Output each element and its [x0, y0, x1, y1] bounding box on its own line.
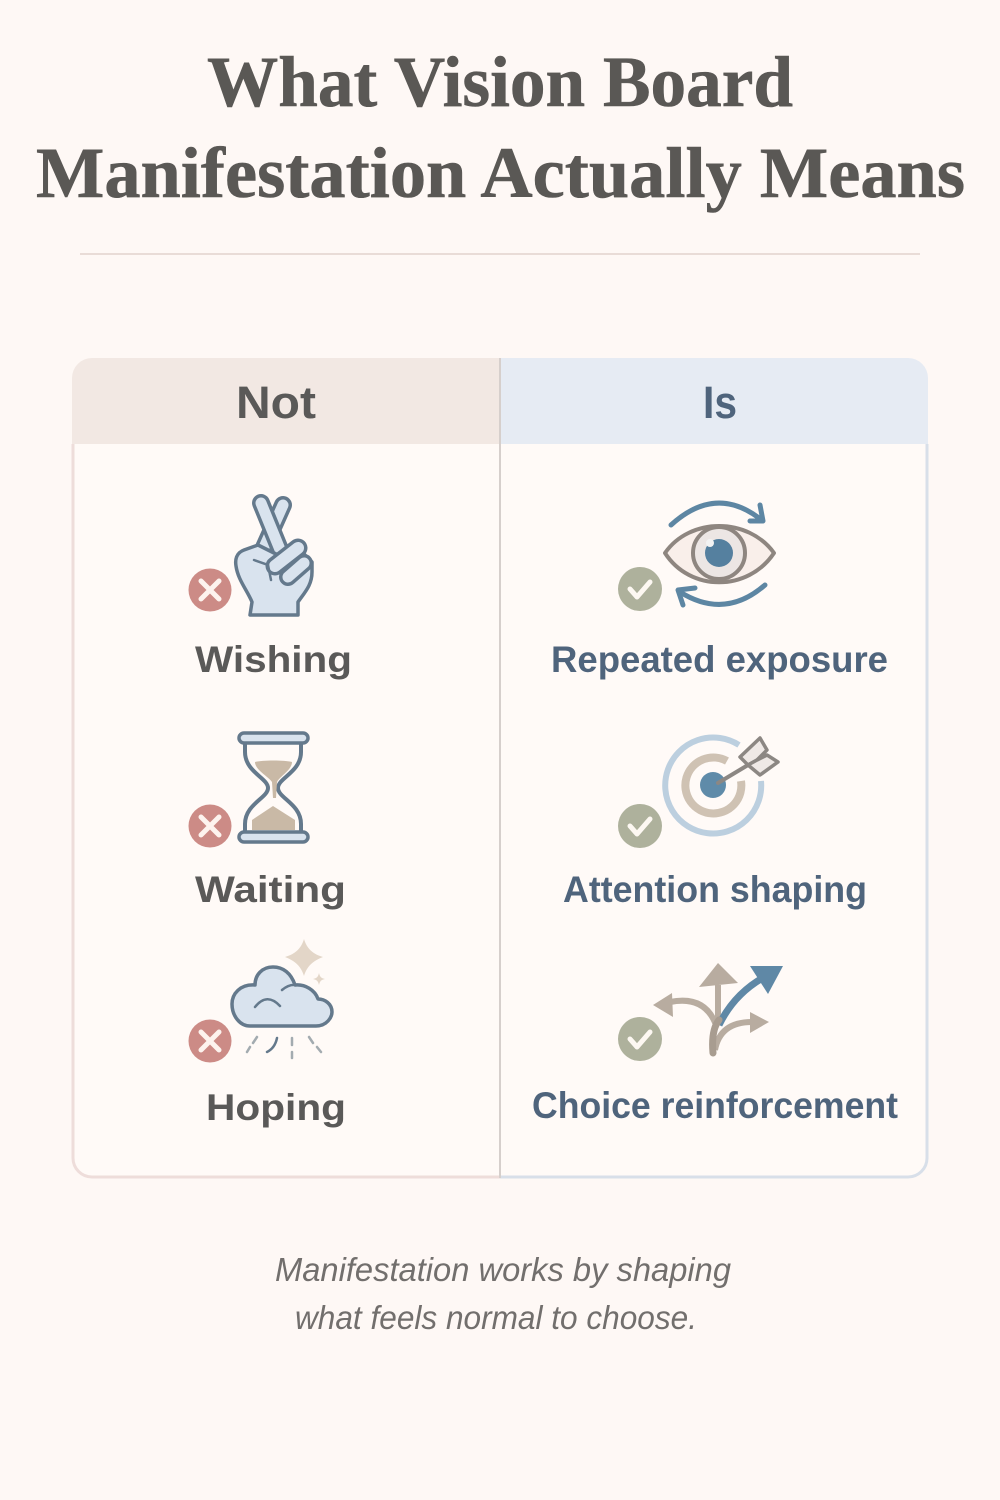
- caption: what feels normal to choose.: [295, 1299, 697, 1336]
- column header: Is: Is: [703, 377, 737, 428]
- item: Repeated exposure: [551, 503, 888, 680]
- item: Attention shaping: [563, 737, 867, 910]
- caption: [275, 1251, 732, 1336]
- title: Manifestation Actually Means: [36, 133, 965, 213]
- panel: comparison table: [72, 358, 928, 1178]
- label: Hoping: Hoping: [206, 1087, 346, 1128]
- icon: branching arrows: [653, 963, 783, 1053]
- title: What Vision Board: [207, 42, 793, 122]
- icon: green check badge: [618, 804, 662, 848]
- label: Waiting: Waiting: [195, 869, 346, 910]
- icon: green check badge: [618, 1017, 662, 1061]
- icon: green check badge: [618, 567, 662, 611]
- icon: red cross badge: [188, 804, 232, 848]
- caption: Manifestation works by shaping: [275, 1251, 732, 1288]
- icon: crossed fingers: [236, 503, 312, 615]
- label: Choice reinforcement: Choice reinforcement: [532, 1085, 898, 1126]
- icon: eye with cycle arrows: [665, 503, 774, 605]
- label: Attention shaping: Attention shaping: [563, 869, 867, 910]
- column header: Not: Not: [236, 377, 316, 428]
- icon: cloud with star and rain: [232, 939, 332, 1058]
- item: Choice reinforcement: [532, 963, 898, 1126]
- title: [36, 42, 965, 213]
- item: Waiting: [188, 733, 346, 910]
- label: Repeated exposure: Repeated exposure: [551, 639, 888, 680]
- icon: red cross badge: [188, 1020, 232, 1062]
- item: Wishing: [188, 503, 352, 680]
- icon: red cross badge: [188, 568, 232, 612]
- column header: Not: [72, 358, 500, 444]
- label: Wishing: Wishing: [195, 639, 352, 680]
- icon: hourglass: [239, 733, 308, 842]
- icon: target with arrow: [665, 737, 778, 833]
- item: Hoping: [188, 939, 346, 1128]
- column header: Is: [500, 358, 928, 444]
